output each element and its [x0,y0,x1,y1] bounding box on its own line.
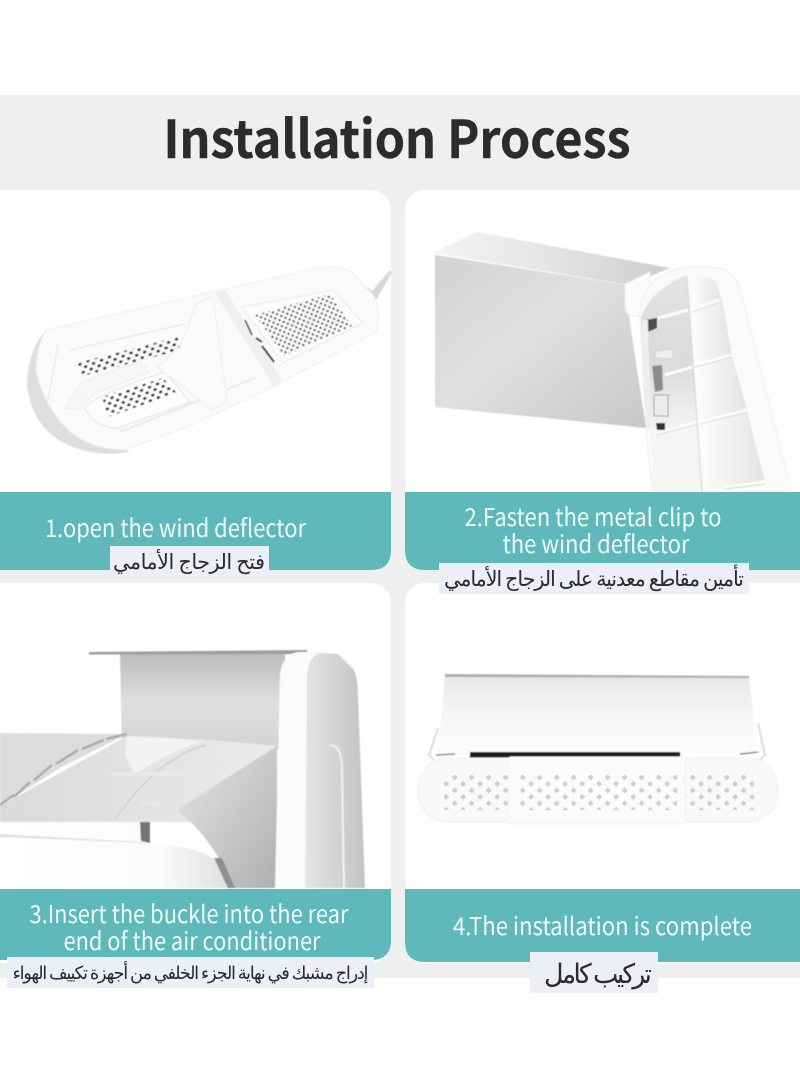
perforated panel left top [77,337,180,376]
panel: step 2: the wind deflector [502,526,690,561]
illustration: open wind deflector [27,267,392,454]
side wedge [177,746,277,888]
left crescent edge [27,330,130,454]
clip arm [65,362,150,410]
panel: step 4 [405,583,800,993]
panel: step 3: end of the air conditioner [64,923,321,958]
card 3 background [0,583,391,963]
teal caption bar 4 [405,889,800,962]
title: Installation Process [164,98,630,173]
lower front white [0,822,230,888]
divider strip [215,290,282,386]
centre flap [157,297,227,410]
card 1 background [0,190,391,570]
caption 2: 2.Fasten the metal clip to [464,499,722,534]
illustration: metal clip [433,232,792,492]
arabic label 3: إدراج مشبك في نهاية الجزء الخلفي من أجهزة تكييف الهواء [13,961,369,984]
panel: step 1 [0,190,392,577]
teal caption bar 1 [0,492,391,570]
panel: step 2 [405,190,800,570]
perforated panel right [242,290,363,363]
slats [0,733,127,806]
arabic label box 4 [530,952,658,993]
ribs [657,300,765,487]
end cap [275,652,320,888]
caption 3: 3.Insert the buckle into the rear [30,896,349,931]
perforated panel left bottom [85,372,190,428]
illustration: installed deflector [418,674,778,824]
teal caption bar 2 [405,492,800,570]
deflector body [640,267,792,492]
arabic label box 3 [7,957,374,988]
card 4 background [405,583,800,963]
card 2 background [405,190,800,570]
panel: step 3 [0,583,391,988]
main body [0,736,277,822]
arabic label 4: تركيب كامل [544,959,652,990]
cells [692,277,722,310]
illustration: buckle on air conditioner [0,650,365,888]
arabic label 2: تأمين مقاطع معدنية على الزجاج الأمامي [444,564,744,592]
caption 1: 1.open the wind deflector [45,510,306,545]
metal tabs [645,318,657,332]
arabic label box 1 [110,546,269,577]
arabic label 1: فتح الزجاج الأمامي [113,549,265,575]
caption 4: 4.The installation is complete [453,908,752,943]
teal caption bar 3 [0,889,391,960]
arabic label box 2 [439,563,749,594]
cavity [641,275,698,430]
